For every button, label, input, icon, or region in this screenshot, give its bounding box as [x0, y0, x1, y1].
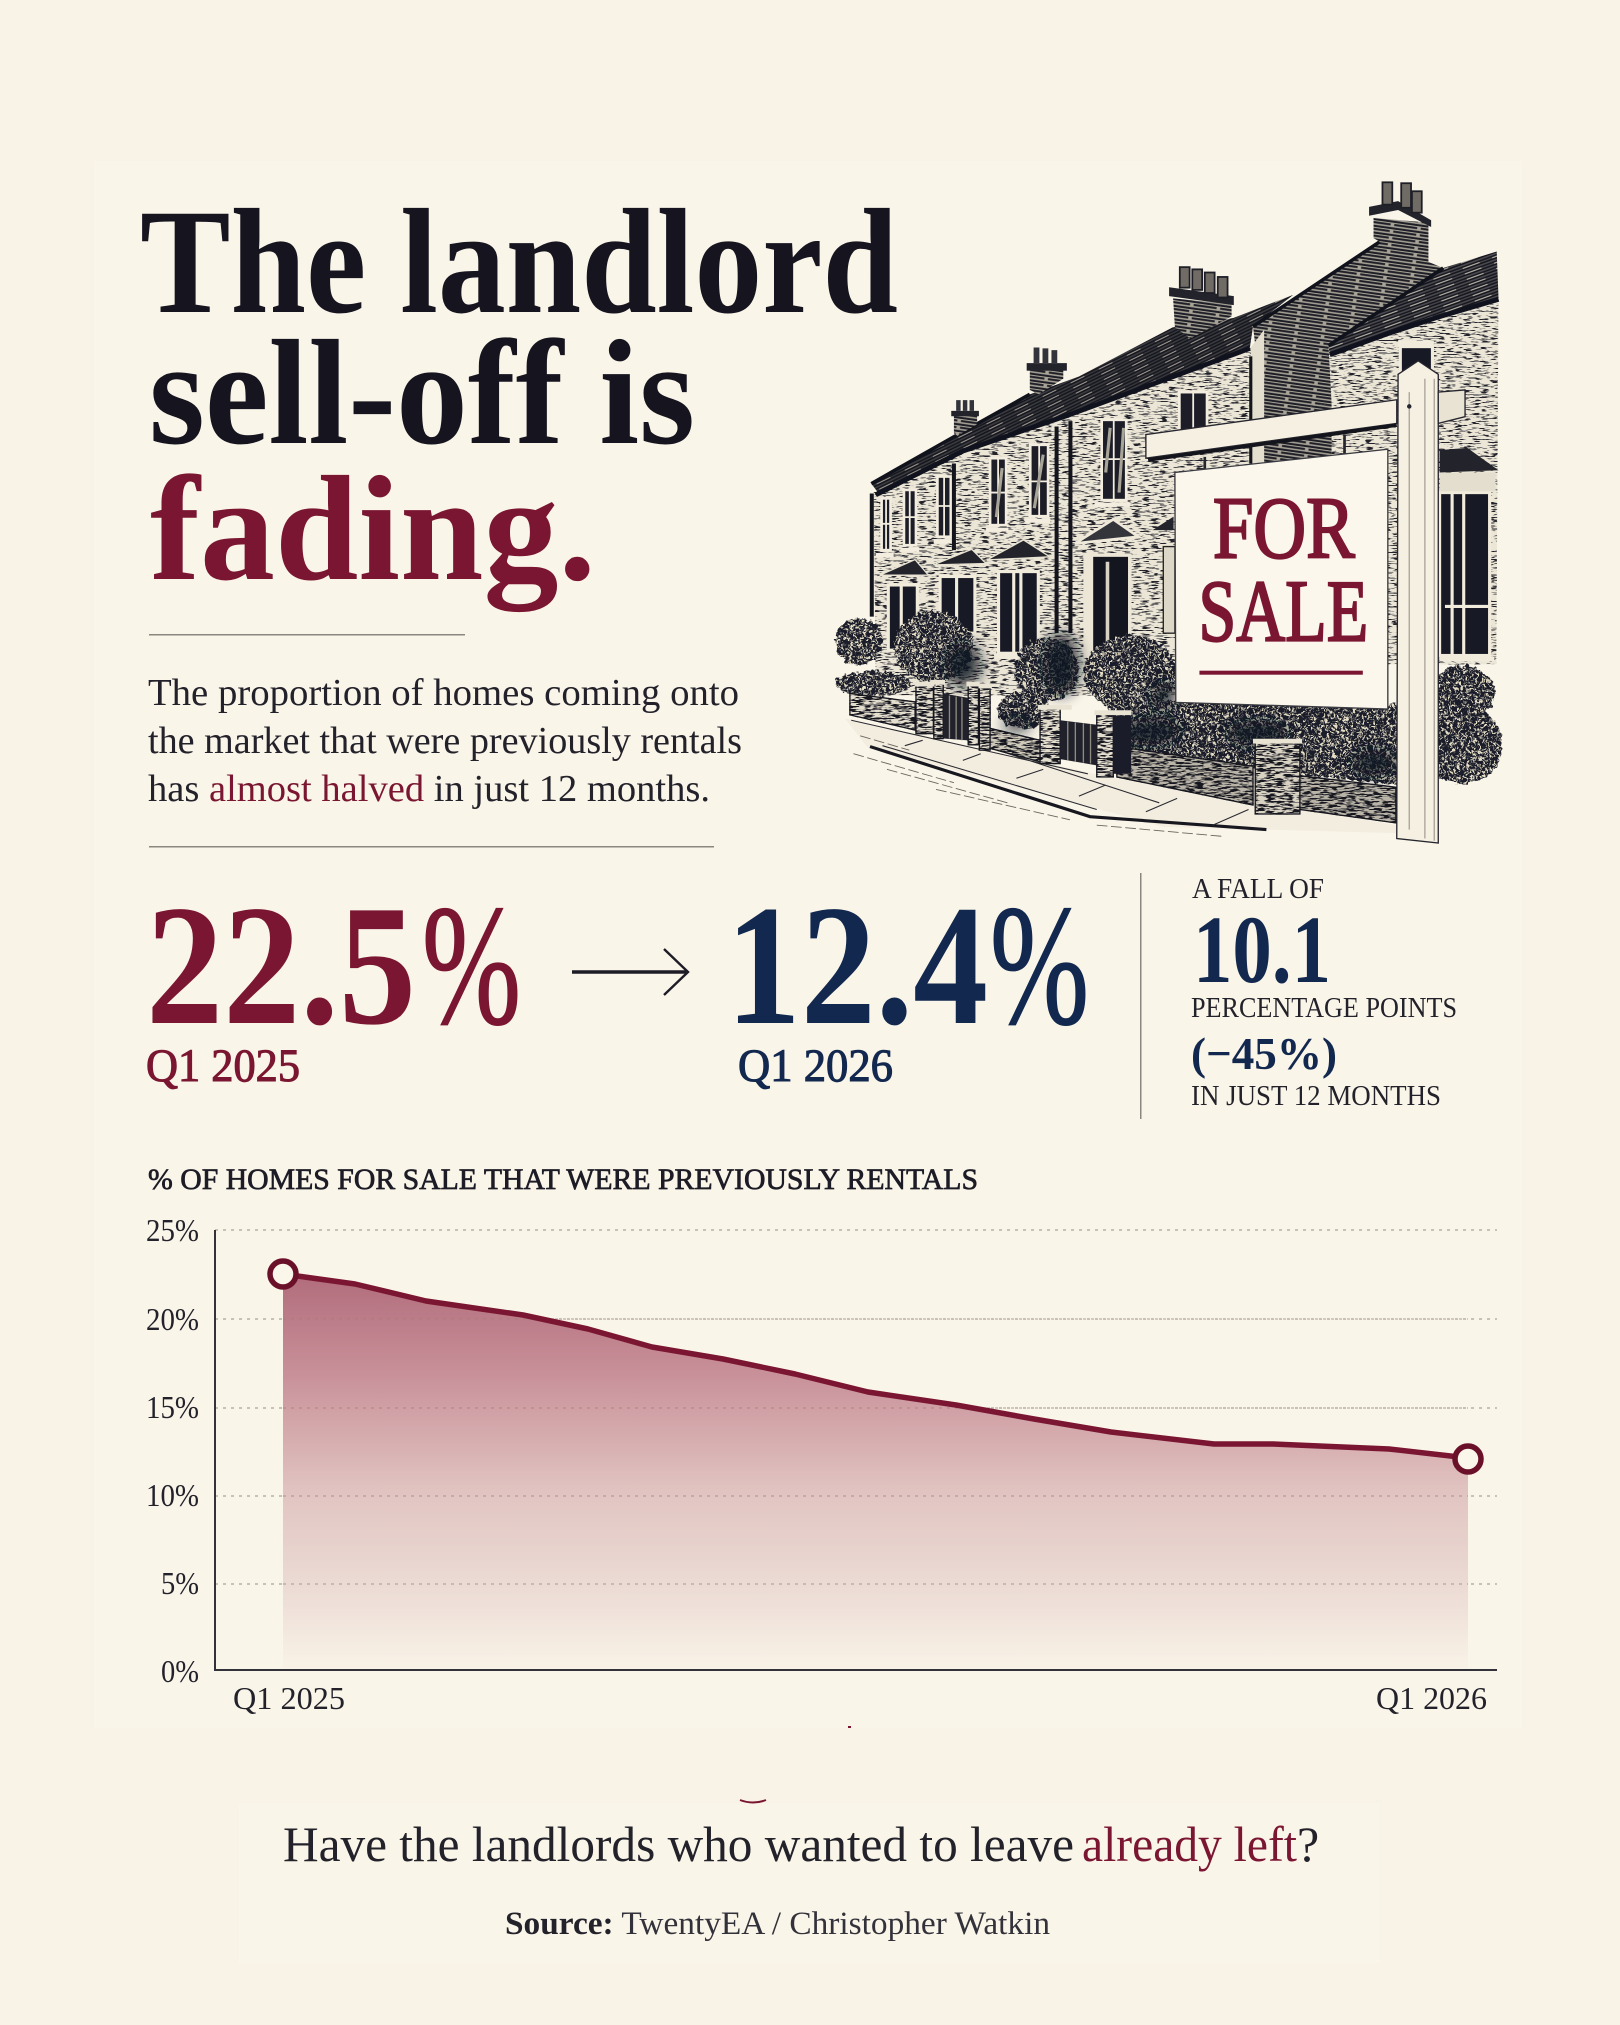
upper windows: [876, 392, 1207, 555]
chimneys: [951, 182, 1431, 436]
area chart: [146, 1212, 1497, 1716]
x axis labels: Q1 2026: [1376, 1680, 1487, 1716]
title: The landlord: [140, 179, 898, 345]
intro paragraph: [148, 672, 742, 810]
title: sell-off is: [149, 310, 695, 476]
title: [140, 179, 898, 612]
x axis labels: [233, 1680, 1487, 1716]
start marker: [270, 1261, 296, 1287]
garden walls and pillars: [850, 682, 1396, 823]
source: Source: TwentyEA / Christopher Watkin: [505, 1906, 1050, 1942]
end marker: [1455, 1446, 1481, 1472]
callout: fall of 10.1 percentage points: 10.1: [1193, 896, 1331, 1003]
roofs and gable: [871, 242, 1499, 495]
bay windows: [888, 343, 1494, 659]
title: fading.: [150, 446, 596, 612]
y axis labels: 10%: [146, 1477, 199, 1513]
for sale board: SALE: [1199, 563, 1368, 660]
axes: [215, 1230, 1497, 1670]
callout: fall of 10.1 percentage points: A FALL OF: [1192, 874, 1324, 905]
stat: 22.5% Q1 2025: [146, 871, 521, 1092]
y axis labels: 15%: [146, 1389, 199, 1425]
y axis labels: 5%: [161, 1565, 199, 1601]
stat: 12.4% Q1 2026: 12.4: [726, 871, 988, 1061]
divider: [149, 634, 465, 636]
callout: fall of 10.1 percentage points: PERCENTAGE POINTS: [1191, 993, 1457, 1024]
house facades: [874, 298, 1499, 696]
y axis labels: 20%: [146, 1301, 199, 1337]
intro paragraph: the market that were previously rentals: [148, 720, 742, 762]
stat: 12.4% Q1 2026: Q1 2026: [738, 1040, 893, 1092]
closing question: Have the landlords who wanted to leave: [283, 1816, 1074, 1872]
data line: [283, 1274, 1468, 1458]
area fill: [283, 1274, 1468, 1670]
bush shadows: [945, 633, 1396, 776]
stat: 22.5% Q1 2025: 22.5: [146, 871, 416, 1061]
stat: 22.5% Q1 2025: Q1 2025: [146, 1040, 300, 1092]
y axis labels: [146, 1212, 199, 1689]
for sale board: FOR: [1213, 480, 1355, 577]
grid lines over area: [283, 1319, 1468, 1584]
porches and bay roofs: [880, 448, 1499, 657]
arrow: [572, 949, 688, 995]
y axis labels: 25%: [146, 1212, 199, 1248]
stray marks: [740, 1727, 851, 1802]
callout: fall of 10.1 percentage points: (−45%): [1191, 1028, 1337, 1079]
pavement: [845, 718, 1396, 836]
divider: [1140, 873, 1142, 1119]
drainpipes: [872, 421, 1070, 633]
x axis labels: Q1 2025: [233, 1680, 345, 1716]
grid lines: [215, 1230, 1497, 1584]
footer panel: [239, 1803, 1380, 1963]
chart heading: % OF HOMES FOR SALE THAT WERE PREVIOUSLY RENTALS: [148, 1163, 978, 1196]
callout: fall of 10.1 percentage points: IN JUST 12 MONTHS: [1191, 1081, 1441, 1112]
intro paragraph: The proportion of homes coming onto: [148, 672, 739, 714]
stat: 22.5% Q1 2025: %: [422, 871, 521, 1061]
closing question: already left: [1082, 1816, 1297, 1872]
gates and pillar caps: [915, 682, 1302, 774]
stat: 12.4% Q1 2026: %: [990, 871, 1089, 1061]
divider: [149, 846, 714, 848]
illustration: terraced houses with for sale sign: [835, 182, 1502, 843]
for sale board: [1175, 449, 1388, 709]
intro paragraph: has almost halved in just 12 months.: [148, 768, 710, 810]
callout: fall of 10.1 percentage points: [1191, 874, 1457, 1112]
y axis labels: 0%: [161, 1653, 199, 1689]
closing question: ?: [1297, 1816, 1319, 1872]
bushes and hedges: [835, 611, 1502, 785]
sign post and arm: [1146, 361, 1465, 843]
main panel: [94, 161, 1522, 1728]
